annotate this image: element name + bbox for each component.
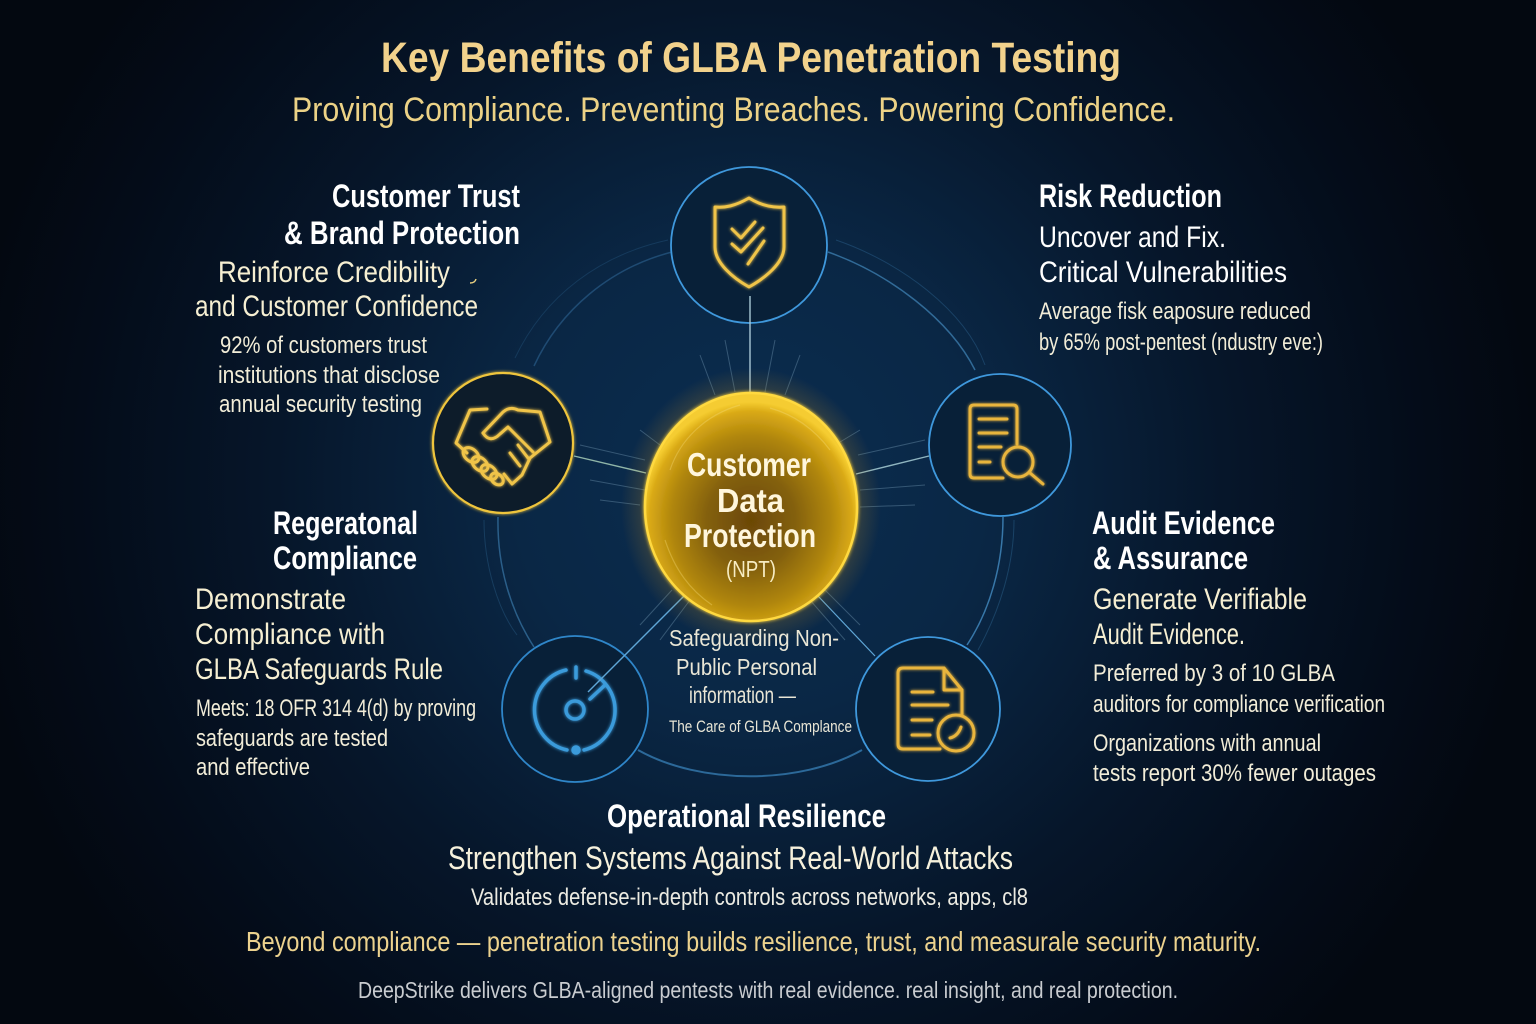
statistic: institutions that disclose	[218, 362, 440, 389]
footer: DeepStrike delivers GLBA-aligned pentests with real evidence. real insight, and real protection.	[358, 977, 1178, 1003]
subheading: Uncover and Fix.	[1039, 221, 1226, 254]
statistic	[196, 695, 476, 781]
title: Key Benefits of GLBA Penetration Testing	[381, 34, 1121, 82]
closing statement: Beyond compliance — penetration testing builds resilience, trust, and measurale security maturity.	[246, 926, 1261, 957]
subheading: Audit Evidence.	[1093, 618, 1245, 651]
sunburst rays	[580, 340, 925, 640]
sphere heading: Data	[717, 482, 785, 519]
icon: document search node	[929, 374, 1071, 516]
statistic: Average fisk eaposure reduced	[1039, 298, 1311, 325]
statistic: and effective	[196, 754, 310, 781]
panel: audit evidence	[1092, 505, 1385, 787]
heading: & Assurance	[1093, 540, 1248, 576]
statistic: 92% of customers trust	[220, 332, 427, 359]
subheading: Demonstrate	[195, 583, 346, 616]
spokes	[574, 296, 929, 692]
heading: Compliance	[273, 540, 417, 576]
heading	[1092, 505, 1275, 576]
statistic	[1039, 298, 1323, 356]
subheading: Generate Verifiable	[1093, 583, 1307, 616]
subheading: Critical Vulnerabilities	[1039, 256, 1287, 289]
subheading	[1039, 221, 1287, 289]
icon: document check node	[856, 637, 1000, 781]
connecting ring	[484, 240, 1014, 776]
statistics: Organizations with annual	[1093, 730, 1321, 757]
subheading: Reinforce Credibility	[218, 256, 450, 289]
center caption: Public Personal	[676, 654, 817, 680]
statistics: Preferred by 3 of 10 GLBA	[1093, 660, 1335, 687]
central sphere	[621, 368, 881, 646]
panel: customer trust	[195, 178, 520, 418]
center caption: Safeguarding Non-	[669, 625, 839, 651]
sphere heading	[684, 446, 816, 582]
statistic: by 65% post-pentest (ndustry eve:)	[1039, 329, 1323, 356]
heading: Customer Trust	[332, 178, 520, 214]
heading: Operational Resilience	[607, 798, 886, 834]
subheading	[195, 256, 478, 323]
subheading	[1093, 583, 1307, 651]
statistics: tests report 30% fewer outages	[1093, 760, 1376, 787]
heading: Regeratonal	[273, 505, 418, 541]
icon: target dial node	[502, 636, 648, 782]
statistic: Meets: 18 OFR 314 4(d) by proving	[196, 695, 476, 722]
icon: shield node	[671, 167, 827, 323]
subheading: and Customer Confidence	[195, 290, 478, 323]
sphere heading: (NPT)	[726, 556, 776, 582]
panel: operational resilience	[448, 798, 1028, 911]
heading: Audit Evidence	[1092, 505, 1275, 541]
panel: regulatory compliance	[195, 505, 476, 781]
subheading	[195, 583, 443, 686]
center caption: The Care of GLBA Complance	[669, 717, 852, 736]
statistics	[1093, 660, 1385, 787]
statistic: safeguards are tested	[196, 725, 388, 752]
statistic	[218, 332, 440, 418]
statistics: auditors for compliance verification	[1093, 691, 1385, 718]
subheading: Compliance with	[195, 618, 385, 651]
heading: & Brand Protection	[284, 215, 520, 251]
subheading: GLBA Safeguards Rule	[195, 653, 443, 686]
heading: Risk Reduction	[1039, 178, 1222, 214]
subheading: Strengthen Systems Against Real-World Attacks	[448, 840, 1013, 876]
center caption: information —	[689, 682, 796, 708]
center caption	[669, 625, 852, 736]
heading	[273, 505, 418, 576]
heading	[284, 178, 520, 251]
description: Validates defense-in-depth controls across networks, apps, cl8	[471, 884, 1028, 911]
panel: risk reduction	[1039, 178, 1323, 356]
subtitle: Proving Compliance. Preventing Breaches. Powering Confidence.	[292, 91, 1175, 129]
sphere heading: Protection	[684, 517, 816, 554]
icon: handshake node	[433, 373, 573, 513]
sphere heading: Customer	[687, 446, 811, 483]
statistic: annual security testing	[219, 391, 422, 418]
